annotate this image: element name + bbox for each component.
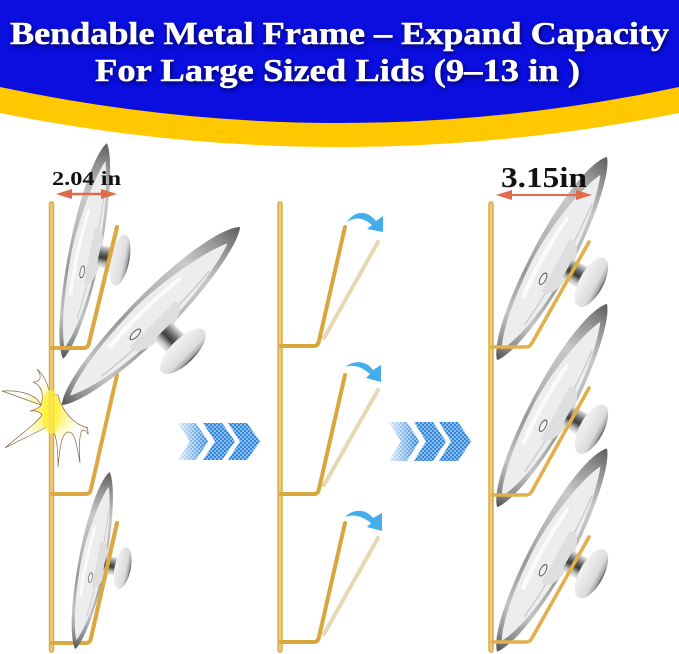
width arrow: 2.04 in [56, 189, 117, 199]
lid: bottom left [62, 469, 148, 654]
width arrow: 3.15in [496, 190, 592, 200]
width label: 3.15in: 3.15in [501, 163, 587, 194]
lid: right middle [479, 294, 658, 535]
rack frame: after [491, 204, 589, 650]
panel: after, expanded rack with lids [479, 147, 658, 654]
title: Bendable Metal Frame – Expand Capacity [10, 15, 669, 51]
arrow chevrons: second [389, 422, 471, 461]
bend arrow: bottom [345, 511, 382, 531]
rack frame: middle [280, 204, 345, 650]
impact glow [42, 390, 60, 434]
title: For Large Sized Lids (9–13 in ) [95, 52, 580, 88]
lid: tilted, hitting the rack [47, 212, 282, 447]
impact burst [2, 369, 88, 467]
width label: 2.04 in: 2.04 in [52, 168, 121, 190]
arm over top lid [89, 227, 117, 343]
bend arrow: middle [345, 362, 381, 382]
ghost arms: bent position [324, 242, 378, 634]
header banner [0, 0, 679, 147]
lid: top left [47, 140, 151, 368]
lid: right top [479, 147, 658, 388]
panel: before, narrow rack with lids [2, 140, 282, 654]
title [10, 15, 669, 88]
panel: bending the frame [280, 204, 383, 650]
arm over bottom lid [91, 523, 117, 638]
blue banner [0, 0, 679, 123]
lid: right bottom [479, 439, 658, 654]
rack frame: before [52, 204, 117, 650]
yellow swoosh [0, 87, 679, 147]
bend arrow: top [347, 213, 383, 232]
arrow chevrons: first [178, 423, 260, 460]
